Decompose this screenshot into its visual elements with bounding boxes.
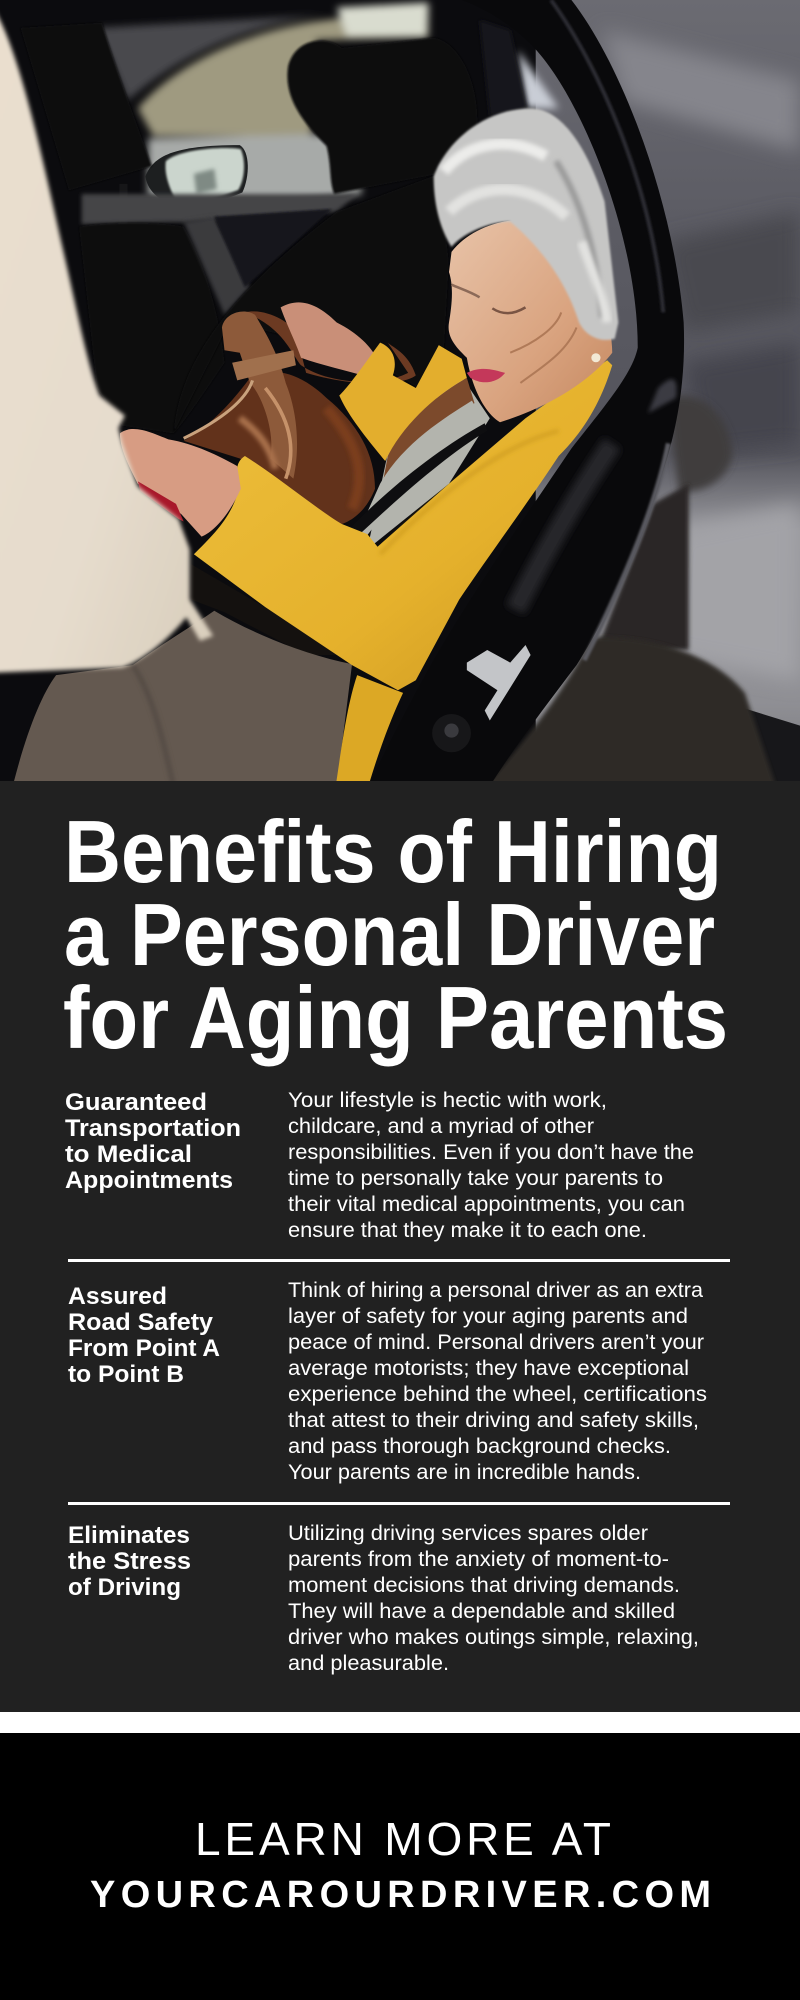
title: a Personal Driver <box>64 885 715 984</box>
car interior window and road view <box>97 3 559 217</box>
section 1 body text: responsibilities. Even if you don’t have the <box>288 1140 694 1164</box>
section 3 body text: moment decisions that driving demands. <box>288 1573 680 1597</box>
car seats and headrests <box>20 23 480 433</box>
section 1 body text: ensure that they make it to each one. <box>288 1218 647 1242</box>
car door with black frame <box>368 0 684 786</box>
section 3 heading <box>68 1522 191 1601</box>
section 2 body text: experience behind the wheel, certifications <box>288 1382 707 1406</box>
section 3 heading: of Driving <box>68 1574 181 1601</box>
section 1 body text: time to personally take your parents to <box>288 1166 663 1190</box>
outside background beyond the car door <box>536 0 800 786</box>
door handle <box>432 645 531 752</box>
section 2 heading: From Point A <box>68 1335 220 1362</box>
helper's cream coat <box>0 10 213 673</box>
section 3 body text: and pleasurable. <box>288 1651 449 1675</box>
title <box>63 802 728 1067</box>
white divider band <box>0 1712 800 1733</box>
title: Benefits of Hiring <box>64 802 722 901</box>
section 2 heading: to Point B <box>68 1361 184 1388</box>
woman's hair <box>434 108 618 340</box>
section 2 body text: average motorists; they have exceptional <box>288 1356 689 1380</box>
woman's hand on the bag <box>281 302 377 377</box>
section 1 heading: Transportation <box>65 1115 241 1142</box>
woman's yellow coat <box>194 343 612 786</box>
helper's hand holding the woman's arm <box>120 429 241 537</box>
dark text panel <box>0 781 800 1712</box>
section 2 heading: Road Safety <box>68 1309 213 1336</box>
section 2 body text: Think of hiring a personal driver as an extra <box>288 1278 703 1302</box>
section 1 body text: childcare, and a myriad of other <box>288 1114 594 1138</box>
section 3 body text: driver who makes outings simple, relaxing, <box>288 1625 699 1649</box>
section 1 body text: Your lifestyle is hectic with work, <box>288 1088 607 1112</box>
call to action: website: YOURCAROURDRIVER.COM <box>90 1874 711 1916</box>
section 2 body text: and pass thorough background checks. <box>288 1434 671 1458</box>
section 2 body text: Your parents are in incredible hands. <box>288 1460 641 1484</box>
section 1 body text: their vital medical appointments, you can <box>288 1192 685 1216</box>
section 1 body text <box>288 1088 694 1242</box>
woman's scarf and top <box>347 373 490 549</box>
call to action: learn more: LEARN MORE AT <box>195 1813 611 1865</box>
woman's face <box>449 220 612 422</box>
section 2 body text: that attest to their driving and safety skills, <box>288 1408 699 1432</box>
photo: elderly woman getting out of a car with a helper <box>0 0 800 781</box>
section 2 heading <box>68 1283 220 1388</box>
woman's handbag <box>184 311 416 527</box>
black call-to-action band <box>0 1733 800 2000</box>
section 2 body text: peace of mind. Personal drivers aren’t your <box>288 1330 704 1354</box>
section 1 heading: to Medical <box>65 1141 192 1168</box>
section 3 body text: Utilizing driving services spares older <box>288 1521 648 1545</box>
car door frame interior trim <box>480 20 528 116</box>
woman's skirt <box>13 611 352 786</box>
section 2 body text: layer of safety for your aging parents and <box>288 1304 688 1328</box>
section 3 body text: They will have a dependable and skilled <box>288 1599 675 1623</box>
dark area below arm <box>191 564 347 655</box>
car mirror <box>145 145 248 207</box>
section 1 heading: Appointments <box>65 1167 233 1194</box>
section 3 heading: Eliminates <box>68 1522 190 1549</box>
section 1 heading <box>65 1089 241 1194</box>
person reflection in the door and ground <box>459 396 786 816</box>
section 3 body text <box>288 1521 699 1675</box>
section 2 heading: Assured <box>68 1283 167 1310</box>
section 1 heading: Guaranteed <box>65 1089 207 1116</box>
section 2 body text <box>288 1278 707 1484</box>
section 3 heading: the Stress <box>68 1548 191 1575</box>
title: for Aging Parents <box>63 968 728 1067</box>
section 3 body text: parents from the anxiety of moment-to- <box>288 1547 669 1571</box>
